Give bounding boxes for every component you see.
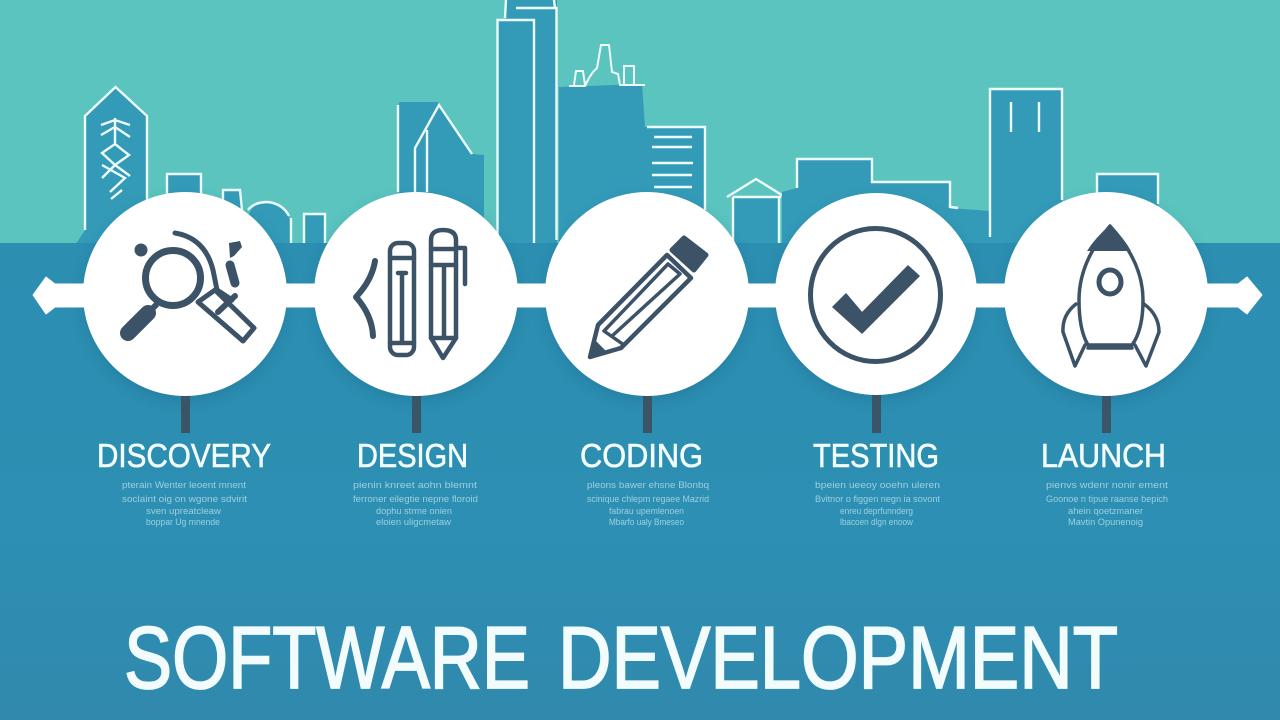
- description: coding: scinique chlepm regaee Mazrid: [587, 494, 709, 504]
- heading: design: DESIGN: [357, 437, 468, 474]
- heading: discovery: DISCOVERY: [97, 437, 271, 474]
- icon: check mark in ring: [810, 228, 940, 362]
- description: discovery: pterain Wenter leoent mnent: [122, 480, 247, 490]
- description: coding: [587, 480, 709, 527]
- description: design: [353, 480, 478, 527]
- building: small roofed house: [727, 179, 785, 244]
- building: tall right tower: [990, 89, 1062, 244]
- description: testing: enreu deprfunnderg: [840, 506, 913, 516]
- description: discovery: boppar Ug mnende: [146, 517, 220, 527]
- description: design: eloien uligcmetaw: [376, 517, 452, 527]
- step 3: coding circle: [545, 192, 749, 396]
- process arrow bar: [33, 277, 1262, 314]
- building: crown rooftop tower: [559, 45, 706, 244]
- building: stepped block: [782, 159, 990, 244]
- description: launch: [1046, 480, 1169, 527]
- background: teal sky: [0, 0, 1280, 244]
- heading: launch: LAUNCH: [1041, 437, 1166, 474]
- icon: bracket and pencils: [356, 230, 465, 358]
- building: twin skyscraper: [497, 0, 557, 244]
- description: coding: Mbarfo ualy Bmeseo: [609, 517, 684, 527]
- icon: rocket: [1063, 225, 1159, 366]
- description: launch: pienvs wdenr nonir ement: [1046, 480, 1169, 490]
- description: launch: Mavtin Opunenoig: [1068, 517, 1143, 527]
- icon: pencil: [590, 238, 706, 357]
- description: testing: [815, 480, 940, 527]
- circle drop shadows: [83, 198, 1208, 402]
- description: launch: Goonoe n tipue raanse bepich: [1046, 494, 1168, 504]
- background: lower blue band: [0, 243, 1280, 720]
- connector stems: [181, 390, 1111, 433]
- column: discovery: [97, 437, 271, 527]
- description: launch: ahein qoetzmaner: [1068, 506, 1143, 516]
- step 5: launch circle: [1004, 192, 1208, 396]
- heading: testing: TESTING: [813, 437, 939, 474]
- title: SOFTWARE: [124, 608, 530, 707]
- description: discovery: soclaint oig on wgone sdvirit: [122, 494, 248, 504]
- description: discovery: [122, 480, 248, 527]
- buildings: small left group: [166, 174, 325, 244]
- title: DEVELOPMENT: [558, 608, 1118, 707]
- description: design: pienin knreet aohn blemnt: [353, 480, 478, 490]
- building: arrow-roof tower: [76, 87, 147, 244]
- step 4: testing circle: [775, 193, 977, 395]
- icon: magnifying glass: [128, 233, 254, 341]
- column: launch: [1041, 437, 1169, 527]
- step 1: discovery circle: [83, 192, 287, 396]
- column: testing: [813, 437, 940, 527]
- column: design: [353, 437, 478, 527]
- city skyline: [76, 0, 1158, 244]
- description: testing: bpeien ueeoy ooehn uleren: [815, 480, 940, 490]
- heading: coding: CODING: [580, 437, 703, 474]
- description: coding: fabrau upemlenoen: [609, 506, 684, 516]
- description: design: ferroner eilegtie nepne floroid: [353, 494, 478, 504]
- description: testing: Bvitnor o figgen negn ia sovont: [815, 494, 940, 504]
- building: small right block: [1097, 174, 1158, 214]
- step 2: design circle: [314, 192, 518, 396]
- building: angled glass tower: [398, 102, 484, 244]
- description: design: dophu strme onien: [376, 506, 452, 516]
- title: [124, 608, 1118, 707]
- description: coding: pleons bawer ehsne Blonbq: [587, 480, 709, 490]
- description: discovery: sven upreatcleaw: [146, 506, 222, 516]
- description: testing: lbacoen dlgn enoow: [840, 517, 913, 527]
- column: coding: [580, 437, 709, 527]
